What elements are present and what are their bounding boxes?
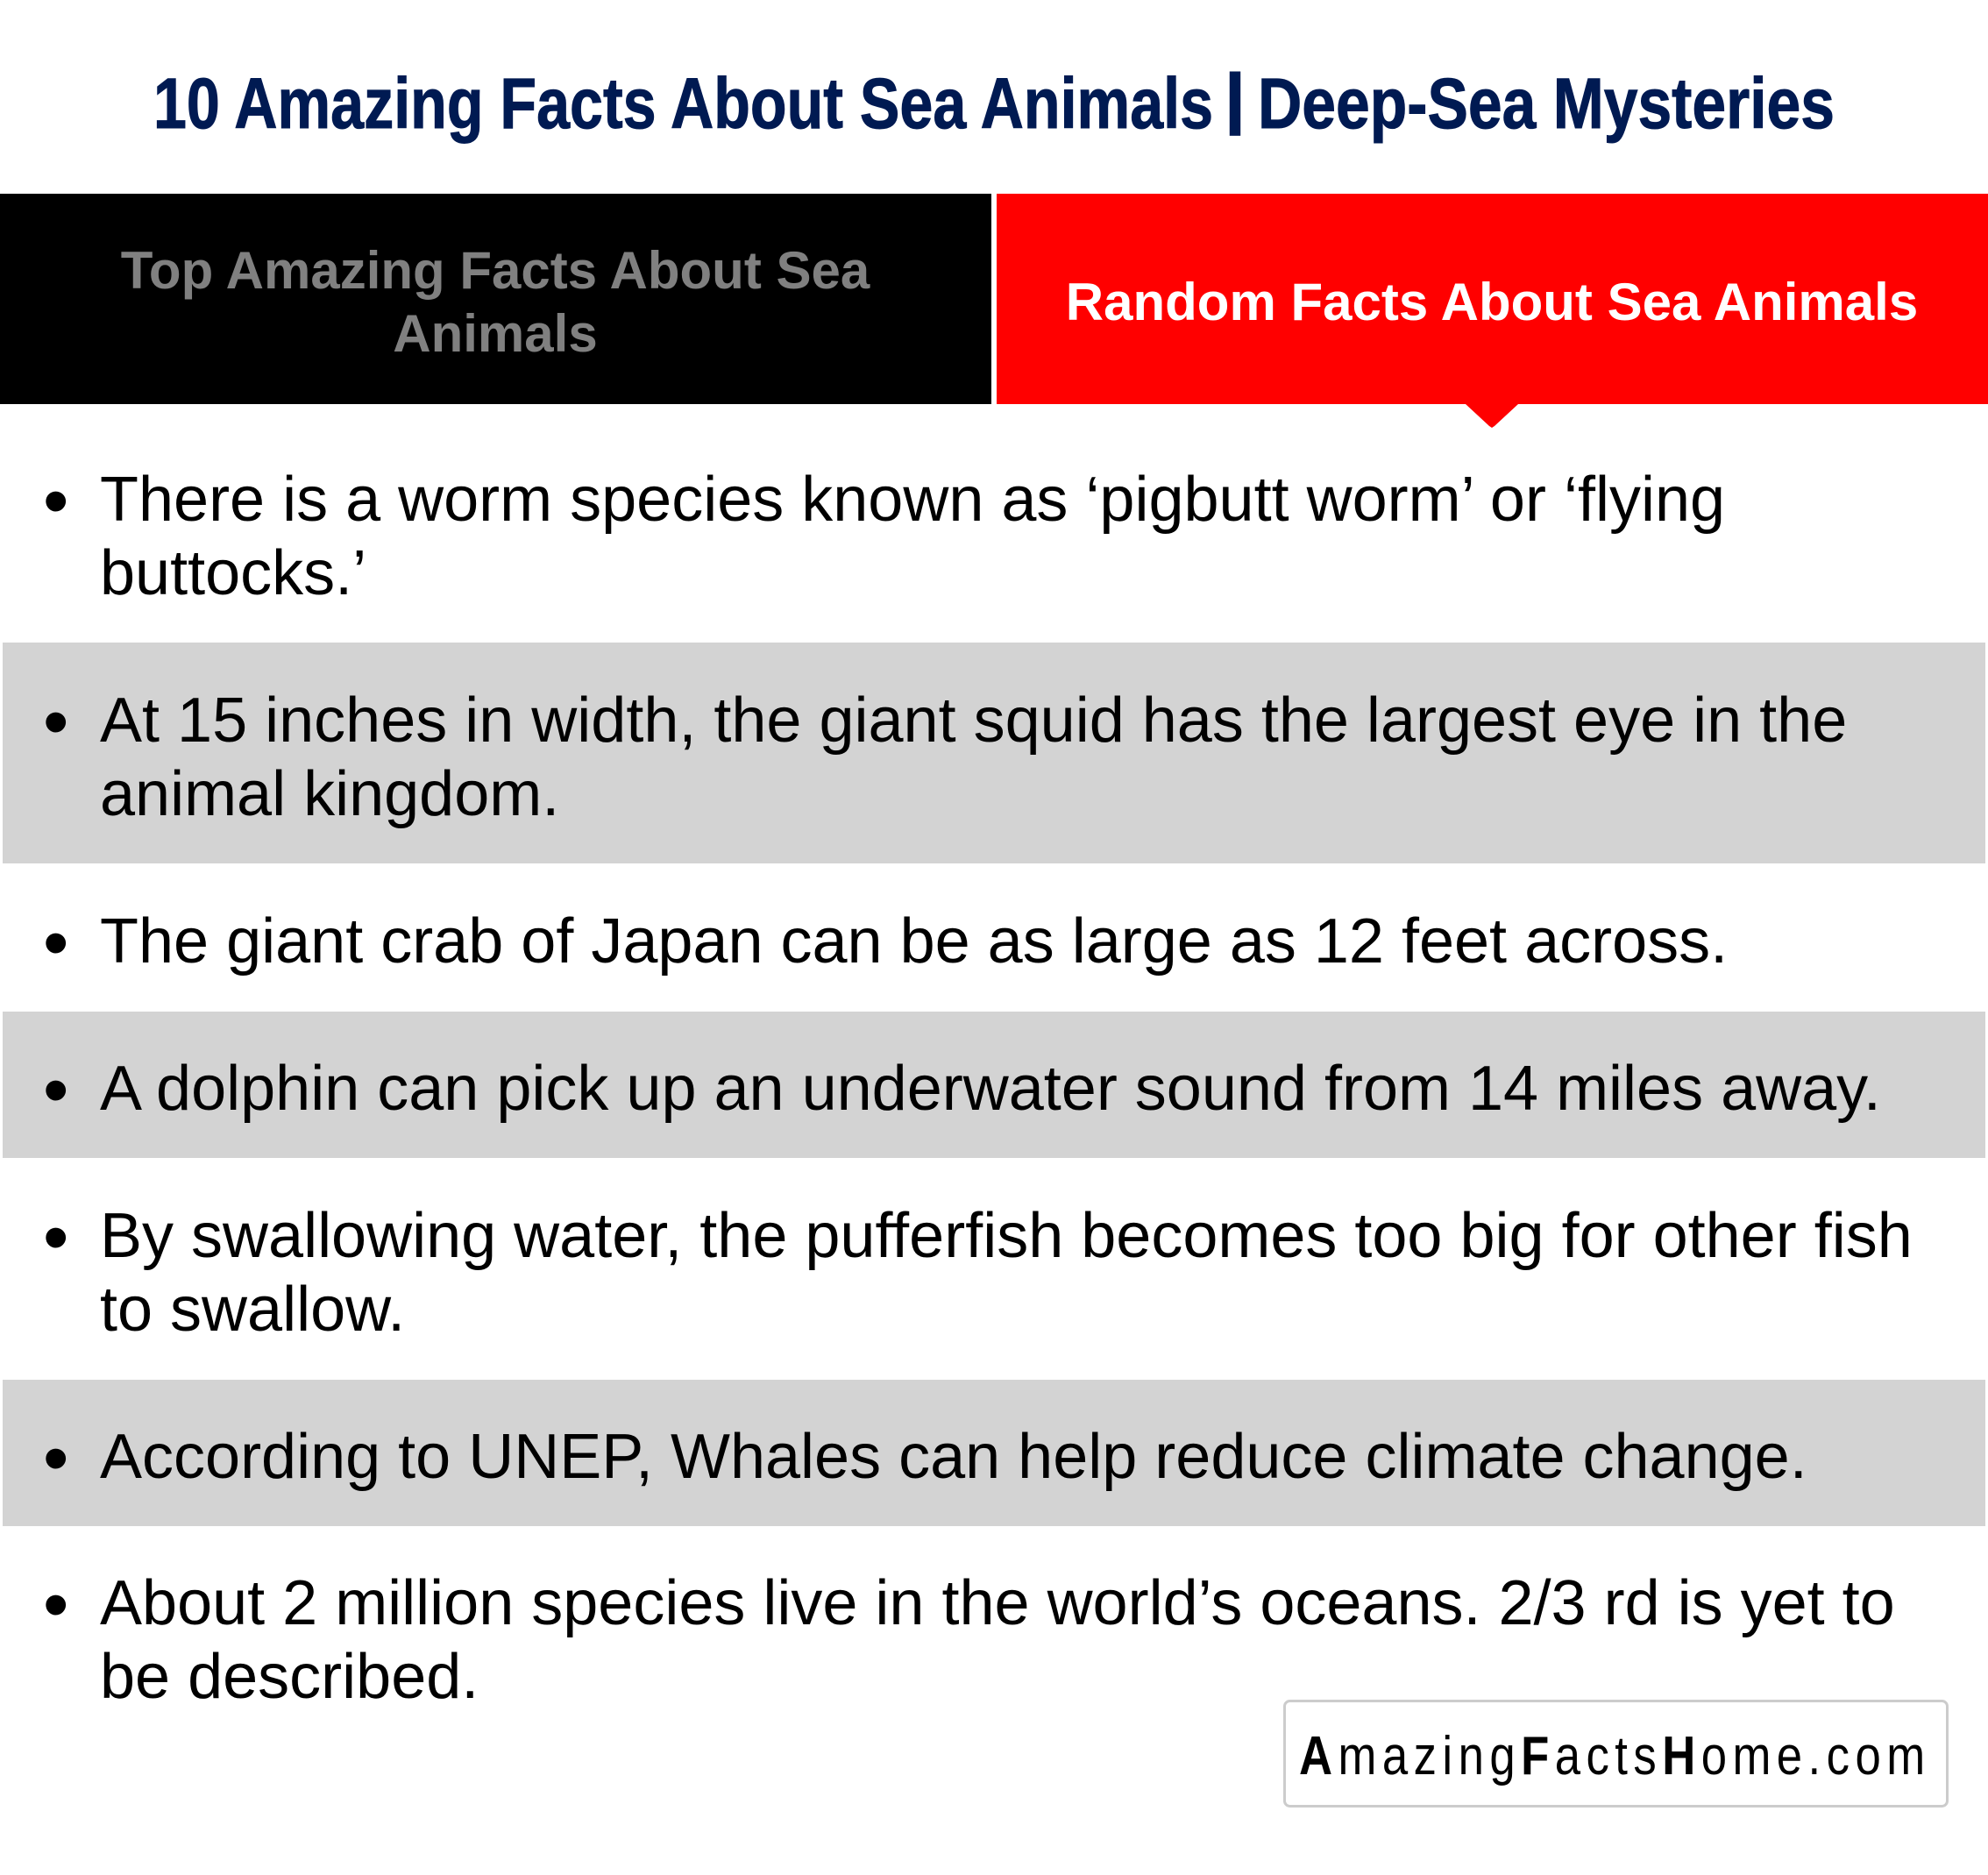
fact 1: • [43,459,68,542]
fact 6 row: • [43,1417,68,1499]
tab: top amazing facts (inactive): Animals [393,304,598,363]
fact 6 row: According to UNEP, Whales can help reduce climate change. [100,1422,1807,1492]
fact 7: be described. [100,1642,479,1712]
fact 7: About 2 million species live in the world’s oceans. 2/3 rd is yet to [100,1568,1895,1638]
fact 1: There is a worm species known as ‘pigbutt worm’ or ‘flying [100,465,1725,535]
tab: top amazing facts (inactive): Top Amazing Facts About Sea [121,241,870,300]
fact 2 row: At 15 inches in width, the giant squid has the largest eye in the [100,685,1847,756]
fact 5: • [43,1196,68,1278]
fact 5: to swallow. [100,1275,405,1345]
fact 2 row: animal kingdom. [100,759,559,829]
tab: random facts (active) with pointer [997,194,1988,428]
fact 5: By swallowing water, the pufferfish becomes too big for other fish [100,1201,1913,1271]
fact 4 row: A dolphin can pick up an underwater sound from 14 miles away. [100,1054,1881,1124]
fact 4 row [3,1012,1985,1158]
title: | [1226,61,1244,135]
fact 2 row: • [43,680,68,763]
fact 4 row: • [43,1048,68,1131]
watermark badge: AmazingFactsHome.com [1299,1726,1931,1786]
title: 10 Amazing Facts About Sea Animals [153,64,1213,144]
tab: random facts (active) with pointer: Random Facts About Sea Animals [1066,273,1918,331]
fact 5 [43,1196,1913,1345]
fact 7: • [43,1563,68,1645]
tab: top amazing facts (inactive) [0,194,991,404]
fact 7 [43,1563,1895,1712]
fact 3: • [43,901,68,984]
fact 1: buttocks.’ [100,538,366,608]
watermark badge [1285,1701,1948,1806]
fact 6 row [3,1380,1985,1526]
fact 2 row [3,643,1985,863]
fact 1 [43,459,1725,608]
title: Deep-Sea Mysteries [1258,64,1835,144]
fact 3: The giant crab of Japan can be as large as 12 feet across. [100,906,1728,977]
